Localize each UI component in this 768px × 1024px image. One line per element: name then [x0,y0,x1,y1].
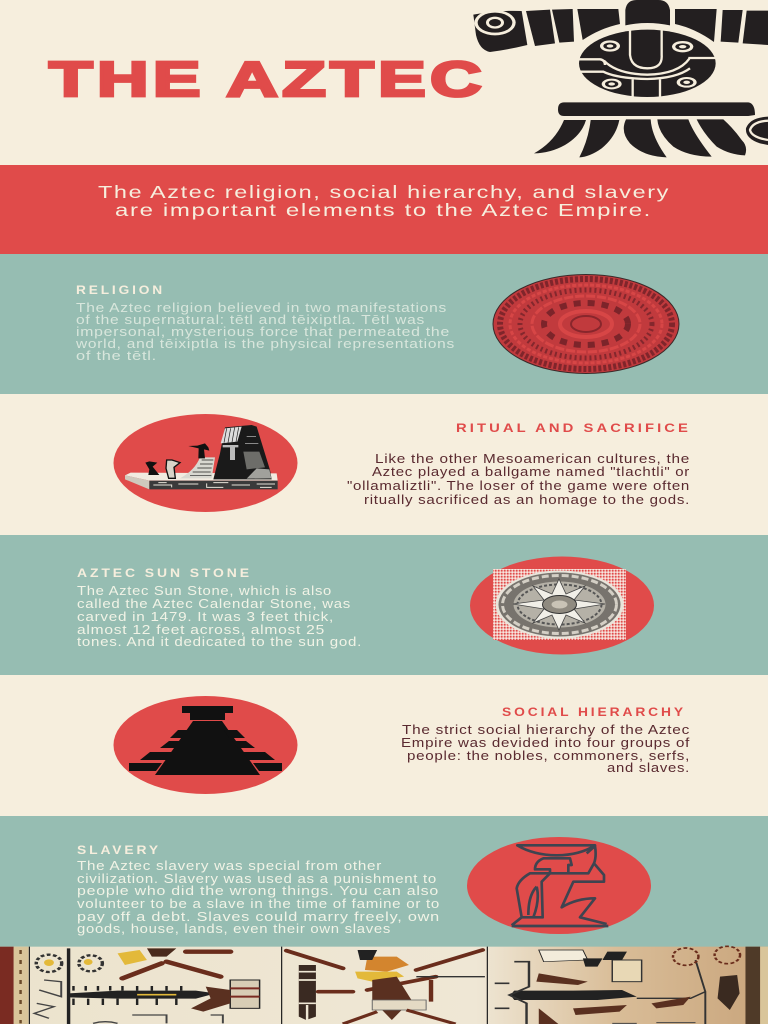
icon: stepped pyramid in red oval [114,696,298,794]
heading: ritual and sacrifice: RITUAL AND SACRIFICE [456,423,691,435]
text: sun stone body: called the Aztec Calendar Stone, was [77,597,351,611]
text: religion body [75,301,455,363]
image: codex painting strip [0,946,768,1024]
icon: grey sun stone in red oval [470,556,654,654]
text: slavery body: volunteer to be a slave in the time of famine or to [77,897,440,911]
panel: social hierarchy [114,696,690,794]
heading: religion: RELIGION [76,285,165,297]
text: sun stone body: almost 12 feet across, almost 25 [77,623,325,637]
text: religion body: world, and tēixiptla is the physical representations [75,337,455,351]
text: sun stone body: tones. And it dedicated to the sun god. [77,635,362,649]
heading: slavery: SLAVERY [77,845,161,857]
heading: social hierarchy: SOCIAL HIERARCHY [502,707,686,719]
text: social hierarchy body: people: the nobles, commoners, serfs, [407,749,690,763]
text: religion body: The Aztec religion believed in two manifestations [76,301,447,315]
panel: ritual and sacrifice [114,414,691,512]
text: sun stone body: The Aztec Sun Stone, which is also [77,584,332,598]
icon: kneeling figure in red oval [467,837,651,934]
text: ritual body [347,452,690,507]
title: THE AZTEC [49,53,486,107]
text: slavery body: goods, house, lands, even their own slaves [77,922,391,936]
panel: religion [75,274,679,374]
text: social hierarchy body: and slaves. [607,761,690,775]
banner: intro: The Aztec religion, social hierarchy, and slavery [98,182,670,202]
text: slavery body: people who did the wrong things. You can also [77,884,439,898]
panel: slavery [77,837,651,936]
icon: red sun stone [493,274,679,374]
text: ritual body: Like the other Mesoamerican cultures, the [375,452,690,466]
icon: aztec glyph face [473,0,768,157]
banner: intro [0,165,768,254]
text: ritual body: ritually sacrificed as an homage to the gods. [364,493,690,507]
text: ritual body: "ollamaliztli". The loser of the game were often [347,479,690,493]
text: social hierarchy body: Empire was devided into four groups of [401,736,690,750]
text: ritual body: Aztec played a ballgame named "tlachtli" or [372,465,690,479]
text: religion body: of the supernatural: tētl and tēixiptla. Tētl was [76,313,425,327]
text: sun stone body [77,584,362,649]
text: religion body: impersonal, mysterious force that permeated the [76,325,450,339]
panel: aztec sun stone [77,556,654,654]
heading: aztec sun stone: AZTEC SUN STONE [77,568,252,580]
text: social hierarchy body: The strict social hierarchy of the Aztec [402,723,690,737]
text: slavery body: civilization. Slavery was used as a punishment to [77,872,437,886]
text: slavery body: pay off a debt. Slaves could marry freely, own [77,910,440,924]
text: slavery body [77,859,440,936]
text: slavery body: The Aztec slavery was special from other [77,859,382,873]
text: social hierarchy body [401,723,690,775]
banner: intro: are important elements to the Aztec Empire. [115,200,652,220]
text: religion body: of the tētl. [76,349,157,363]
text: sun stone body: carved in 1479. It was 3 feet thick, [77,610,334,624]
icon: temple scene in red oval [114,414,298,512]
